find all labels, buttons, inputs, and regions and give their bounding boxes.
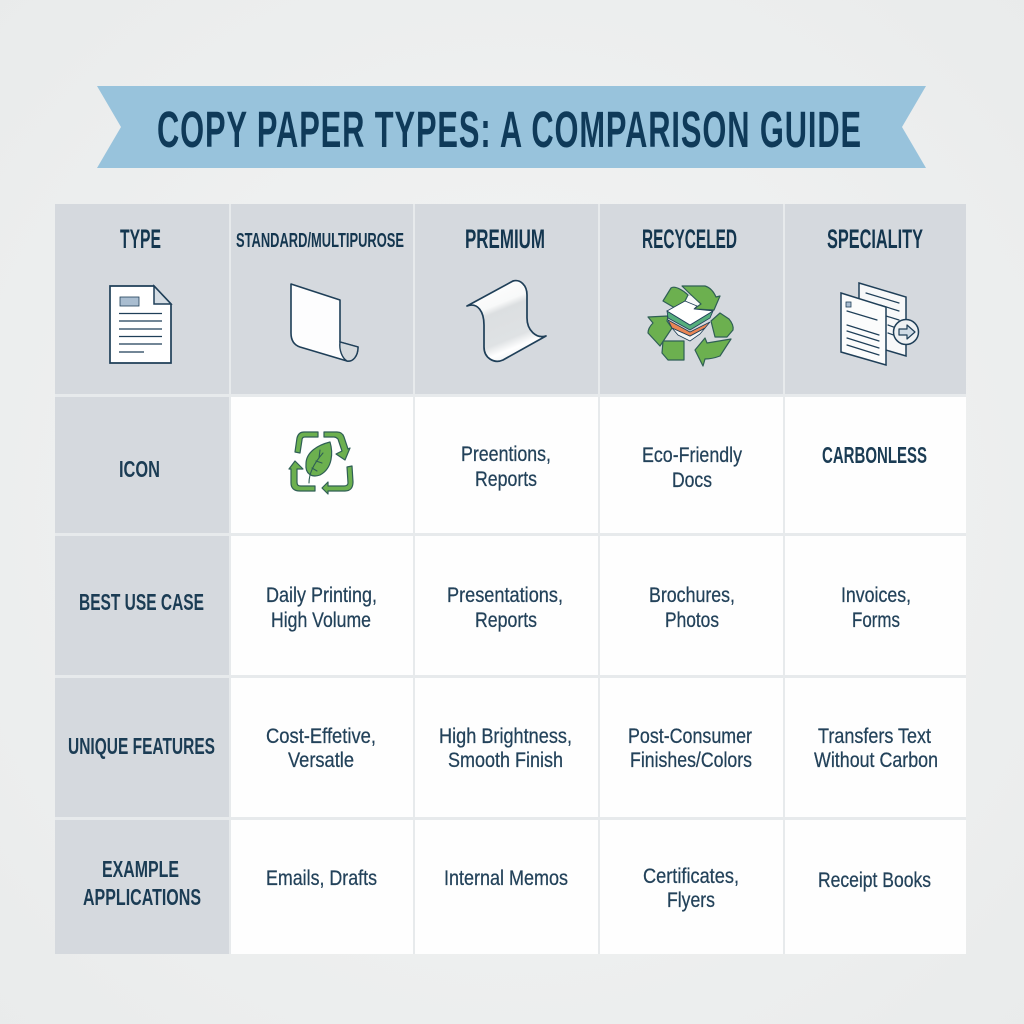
row: example applications: Certificates, [643,865,739,888]
header cell: type [55,204,229,394]
row: best use case: High Volume [271,609,371,632]
row: best use case: Reports [475,609,537,632]
row: example applications: APPLICATIONS [83,884,201,910]
row: unique features: Smooth Finish [448,749,563,772]
row: icon: Reports [475,468,537,491]
row: unique features: High Brightness, [439,725,572,748]
row: icon: Preentions, [461,443,551,466]
row: icon: CARBONLESS [822,442,927,468]
row: example applications: Emails, Drafts [266,867,377,890]
row: unique features: Post-Consumer [628,725,752,748]
row: unique features [55,678,966,817]
row: example applications: Flyers [667,889,715,912]
row: best use case: Daily Printing, [266,584,377,607]
row: example applications: Internal Memos [444,867,568,890]
row: icon: ICON [119,456,160,482]
icon: leaf with recycling arrows [289,432,353,494]
row: icon: Docs [672,469,712,492]
row: icon: Eco-Friendly [642,444,742,467]
row: best use case: Invoices, [841,584,911,607]
header cell: premium [415,204,598,394]
header row [55,204,966,394]
row: best use case: Forms [852,609,900,632]
header cell: recycled: RECYCELED [642,224,737,254]
row: icon [55,397,966,533]
icon: glossy sheet [467,281,546,361]
row: example applications [55,820,966,954]
header cell: speciality: SPECIALITY [827,224,923,254]
row: unique features: UNIQUE FEATURES [68,733,215,759]
header cell: premium: PREMIUM [465,224,545,254]
icon: document [110,286,171,363]
row: best use case: BEST USE CASE [79,589,204,615]
row: best use case: Presentations, [447,584,563,607]
icon: carbonless forms [841,283,918,365]
row: unique features: Cost-Effetive, [266,725,376,748]
row: best use case [55,536,966,675]
header cell: recycled [600,204,783,394]
row: unique features: Transfers Text [818,725,931,748]
row: unique features: Finishes/Colors [630,749,752,772]
title banner [97,86,926,168]
icon: recycling arrows with paper stack [648,286,733,366]
row: unique features: Without Carbon [814,749,938,772]
header cell: type: TYPE [120,224,161,254]
icon: curled sheet [291,284,358,361]
row: best use case: Brochures, [649,584,735,607]
header cell: standard: STANDARD/MULTIPUROSE [236,230,404,252]
header cell: speciality [785,204,966,394]
row: example applications: EXAMPLE [102,856,179,882]
row: unique features: Versatle [288,749,354,772]
header cell: standard [231,204,413,394]
row: example applications: Receipt Books [818,869,931,892]
row: best use case: Photos [665,609,719,632]
comparison table [55,204,966,954]
